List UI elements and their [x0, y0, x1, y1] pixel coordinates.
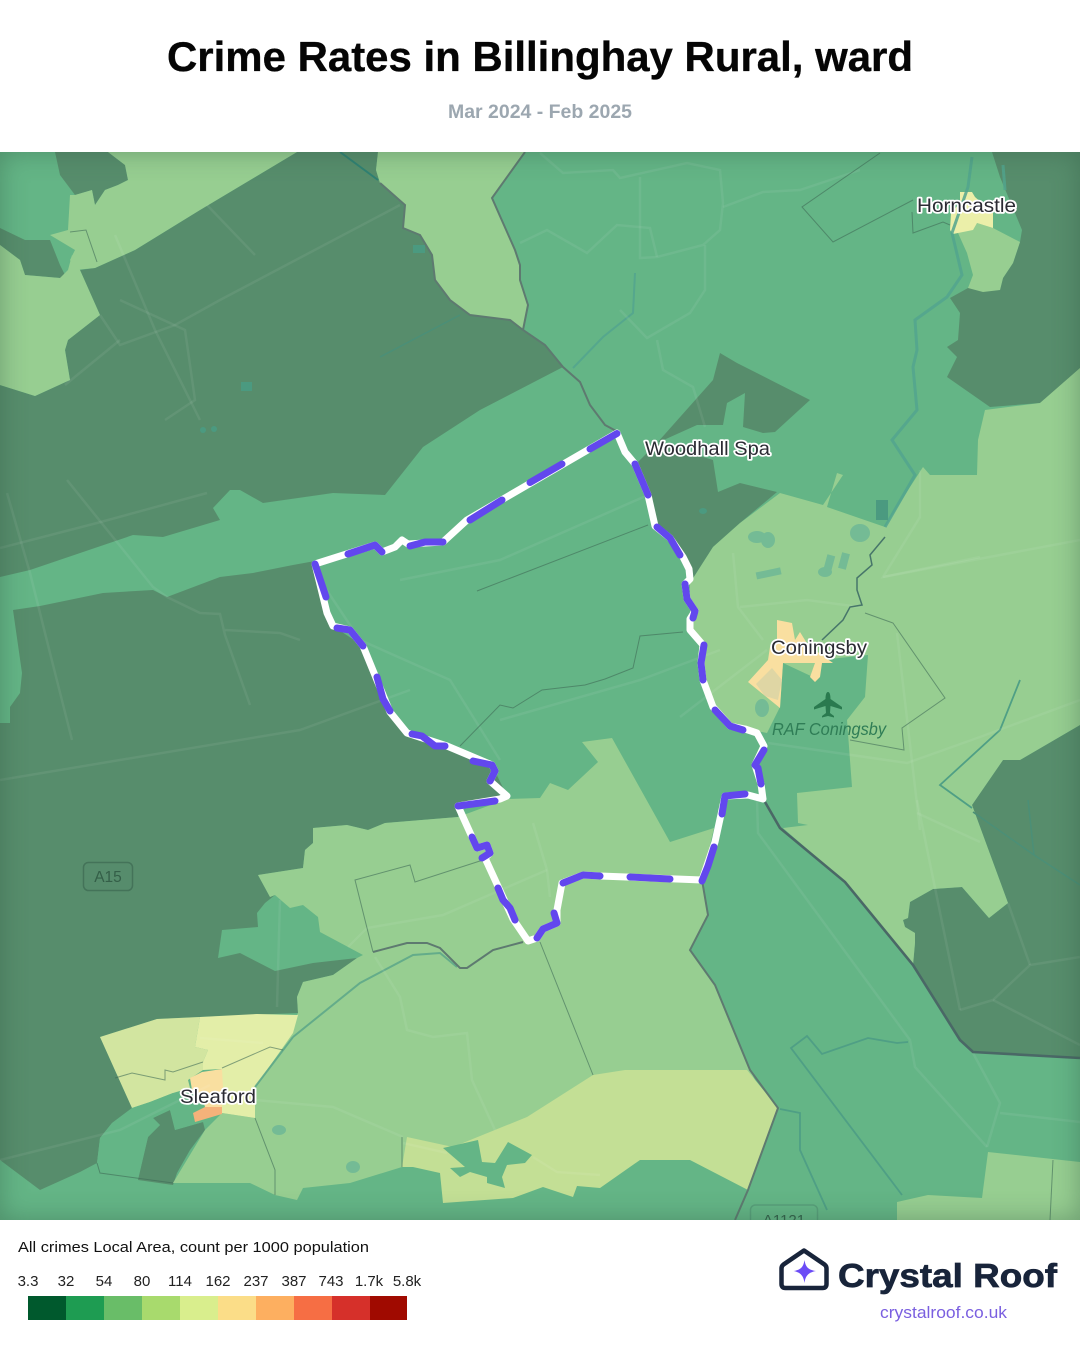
yellow-green band — [402, 1070, 778, 1203]
place label: Sleaford: Sleaford — [180, 1086, 256, 1108]
legend tick labels: 114 — [168, 1273, 192, 1290]
road sign: A15: A15 — [94, 869, 122, 886]
logo: Crystal Roof — [782, 1250, 1058, 1322]
thin ward boundaries — [70, 153, 1053, 1220]
legend tick labels: 237 — [243, 1273, 269, 1290]
legend tick labels: 32 — [58, 1273, 74, 1290]
map edge vignette — [0, 152, 1080, 1220]
website: crystalroof.co.uk — [880, 1303, 1008, 1322]
roads — [0, 153, 1080, 1175]
legend title: All crimes Local Area, count per 1000 population — [18, 1239, 369, 1256]
dark boundary lines — [373, 152, 778, 1220]
icon: house with star — [782, 1250, 826, 1288]
legend — [18, 1239, 422, 1320]
legend tick labels: 80 — [134, 1273, 150, 1290]
light green areas — [0, 152, 1080, 1220]
legend tick labels: 743 — [318, 1273, 344, 1290]
icon: airfield plane — [814, 692, 842, 718]
subtitle: date range: Mar 2024 - Feb 2025 — [448, 102, 632, 123]
legend tick labels: 1.7k — [355, 1273, 384, 1290]
road sign: A1121 — [750, 1204, 818, 1220]
legend tick labels: 5.8k — [393, 1273, 422, 1290]
road sign: A1121: A1121 — [763, 1212, 805, 1229]
Coningsby ward — [748, 620, 833, 708]
wordmark: Crystal Roof — [838, 1257, 1058, 1294]
legend tick labels: 162 — [205, 1273, 231, 1290]
Horncastle ward — [950, 192, 993, 234]
Sleaford wards — [100, 1017, 208, 1108]
ward outline: Billinghay Rural — [315, 433, 764, 941]
legend tick labels — [18, 1273, 422, 1290]
rivers and water — [255, 157, 1005, 1087]
dark areas — [0, 152, 1080, 1190]
title: Crime Rates in Billinghay Rural, ward — [167, 33, 913, 80]
legend tick labels: 387 — [281, 1273, 307, 1290]
place label: Horncastle: Horncastle — [917, 195, 1016, 217]
place label: Woodhall Spa: Woodhall Spa — [645, 438, 770, 460]
legend tick labels: 54 — [96, 1273, 112, 1290]
road sign: A15 — [84, 862, 132, 890]
place label: RAF Coningsby: RAF Coningsby — [772, 719, 887, 739]
legend tick labels: 3.3 — [18, 1273, 38, 1290]
place label: Coningsby: Coningsby — [771, 637, 867, 659]
legend colour scale — [28, 1296, 407, 1320]
